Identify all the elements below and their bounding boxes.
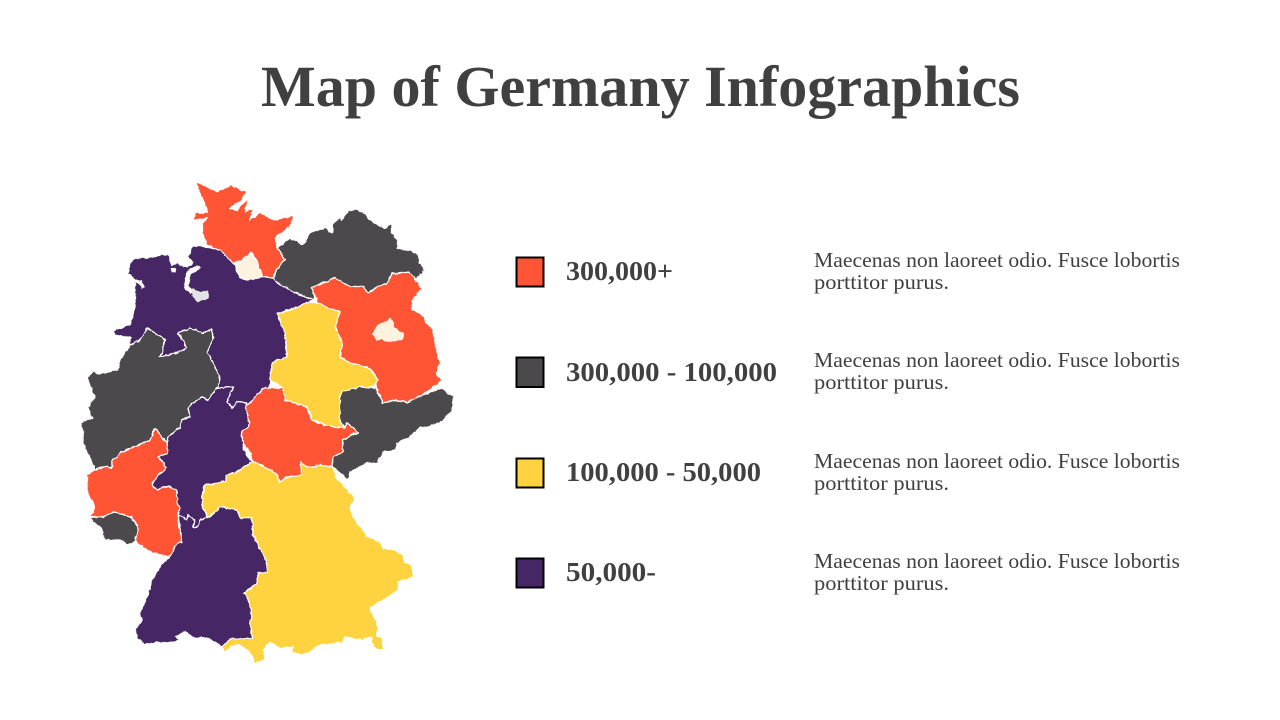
description 1: porttitor purus. (814, 270, 949, 294)
region: Thuringia (242, 388, 359, 482)
legend row 3 (516, 449, 1180, 495)
description 4: Maecenas non laoreet odio. Fusce lobortis (814, 549, 1180, 573)
region: Berlin (372, 317, 404, 343)
swatch: orange (516, 258, 544, 286)
description 1: Maecenas non laoreet odio. Fusce lobortis (814, 248, 1180, 272)
swatch: yellow (516, 458, 544, 488)
swatch: purple (516, 558, 544, 588)
legend row 2 (516, 348, 1180, 394)
region: Hamburg (235, 252, 263, 280)
region: Bremen (192, 288, 209, 303)
region: Saarland (90, 512, 138, 545)
region: Lower Saxony (113, 246, 315, 408)
description 3: porttitor purus. (814, 471, 949, 495)
label: 100,000 - 50,000: 100,000 - 50,000 (566, 457, 761, 487)
swatch: dark gray (516, 358, 544, 387)
region: Baden-Wuerttemberg (135, 507, 268, 647)
label: 300,000 - 100,000: 300,000 - 100,000 (566, 357, 777, 387)
description 2: Maecenas non laoreet odio. Fusce lobortis (814, 348, 1180, 372)
region: Rhineland-Palatinate (87, 428, 182, 557)
region: Saxony-Anhalt (270, 302, 378, 428)
region: Saxony (332, 387, 453, 480)
coastal inlet: Weser (186, 267, 199, 292)
region: Bavaria (202, 461, 414, 663)
region: Schleswig-Holstein (193, 181, 293, 278)
description 4: porttitor purus. (814, 571, 949, 595)
label: 50,000-: 50,000- (566, 557, 656, 587)
description 3 (814, 449, 1180, 495)
region: North Rhine-Westphalia (80, 328, 220, 470)
description 4 (814, 549, 1180, 595)
description 2: porttitor purus. (814, 370, 949, 394)
region: Hesse (152, 387, 253, 528)
legend row 1 (516, 248, 1180, 294)
map of Germany (80, 181, 453, 663)
title: Map of Germany Infographics (261, 54, 1020, 119)
coastal inlet: Jade (134, 268, 174, 288)
label: 300,000+: 300,000+ (566, 256, 673, 286)
description 3: Maecenas non laoreet odio. Fusce lobortis (814, 449, 1180, 473)
region: Brandenburg (312, 272, 443, 403)
description 1 (814, 248, 1180, 294)
legend row 4 (516, 549, 1180, 595)
description 2 (814, 348, 1180, 394)
region: Mecklenburg-Vorpommern (273, 207, 425, 300)
